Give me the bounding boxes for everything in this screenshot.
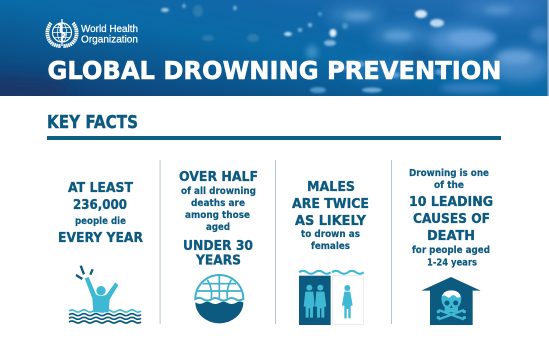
icon: WHO emblem (47, 19, 77, 46)
text: males are twice as likely: to drown as (301, 229, 360, 240)
heading: key facts: KEY FACTS (47, 112, 138, 133)
WHO logo (47, 19, 138, 46)
column divider 3 (391, 160, 392, 324)
column divider 1 (160, 160, 161, 324)
text: males are twice as likely: females (311, 241, 350, 252)
text: ten leading causes of death: CAUSES OF (413, 211, 490, 227)
icon: globe under water (195, 275, 243, 323)
text: males are twice as likely: ARE TWICE (292, 196, 369, 212)
text: males are twice as likely (292, 179, 369, 252)
text: over half of all drowning deaths: deaths are (191, 198, 245, 209)
text: over half of all drowning deaths (179, 169, 258, 268)
text: over half of all drowning deaths: YEARS (195, 252, 241, 268)
text: ten leading causes of death: Drowning is one (409, 168, 489, 179)
panel: under 30 years (179, 169, 258, 323)
text: ten leading causes of death: of the (434, 180, 464, 191)
text: over half of all drowning deaths: among those (185, 210, 250, 221)
icon: house with skull (421, 277, 481, 325)
text: at least 236,000 people die every year: 236,000 (73, 197, 127, 213)
text: ten leading causes of death: DEATH (427, 228, 475, 244)
text: over half of all drowning deaths: of all drowning (181, 186, 256, 197)
column divider 2 (275, 160, 276, 324)
panel: leading cause of death (409, 168, 493, 325)
text: ten leading causes of death: 10 LEADING (409, 194, 493, 210)
text: at least 236,000 people die every year: EVERY YEAR (58, 230, 144, 246)
text: over half of all drowning deaths: OVER HALF (179, 169, 258, 185)
text: at least 236,000 people die every year: people die (75, 216, 126, 227)
logo name: Organization (81, 34, 138, 46)
logo name (81, 23, 138, 46)
panel: deaths per year (58, 180, 144, 323)
text: ten leading causes of death: 1-24 years (427, 258, 477, 268)
text: males are twice as likely: MALES (307, 179, 355, 195)
text: over half of all drowning deaths: aged (206, 222, 230, 233)
text: at least 236,000 people die every year: AT LEAST (68, 180, 134, 196)
icon: males and female comparison (299, 271, 364, 325)
logo name: World Health (81, 23, 138, 35)
text: ten leading causes of death (409, 168, 493, 268)
text: over half of all drowning deaths: UNDER 30 (183, 238, 253, 254)
text: ten leading causes of death: for people aged (412, 245, 490, 256)
title: GLOBAL DROWNING PREVENTION (48, 56, 502, 85)
text: at least 236,000 people die every year (58, 180, 144, 246)
header banner (0, 0, 549, 104)
icon: drowning person (69, 266, 141, 323)
heading rule (47, 136, 501, 140)
text: males are twice as likely: AS LIKELY (295, 213, 366, 229)
panel: males twice as likely (292, 179, 369, 325)
